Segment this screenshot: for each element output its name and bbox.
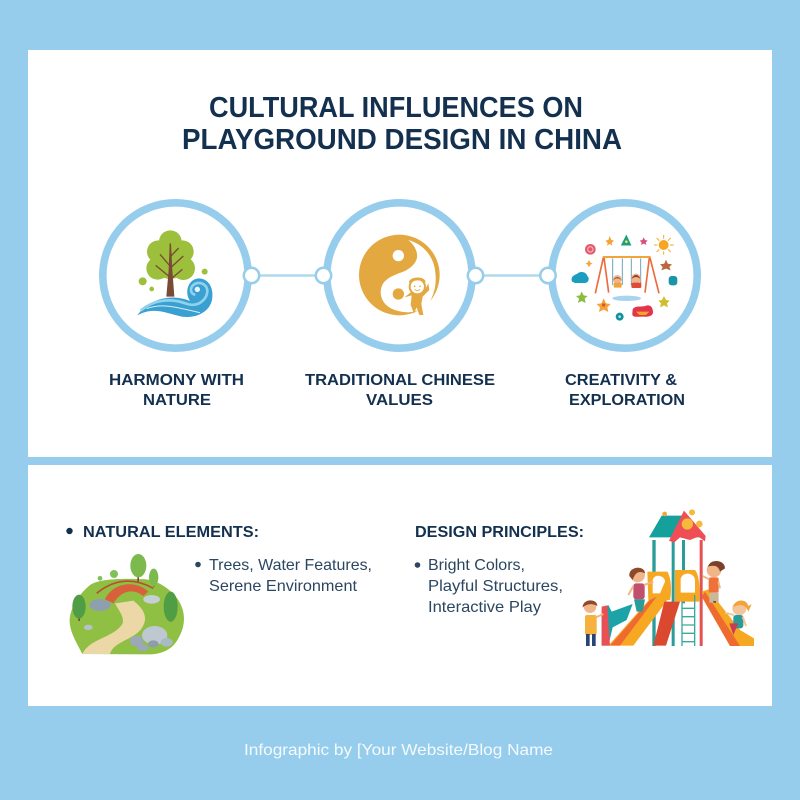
label: traditional chinese values	[305, 372, 495, 409]
illustration: playground with children	[583, 509, 754, 646]
text: design principles list	[415, 557, 563, 616]
heading: design principles: DESIGN PRINCIPLES:	[415, 524, 584, 541]
circle: nature	[103, 203, 248, 348]
label: creativity and exploration: CREATIVITY &	[565, 372, 677, 389]
label: traditional chinese values: VALUES	[366, 392, 433, 409]
title: CULTURAL INFLUENCES ON	[209, 92, 583, 124]
icon: swing and play shapes	[572, 235, 677, 321]
label: harmony with nature: HARMONY WITH	[109, 372, 244, 389]
title: PLAYGROUND DESIGN IN CHINA	[182, 124, 622, 156]
label: harmony with nature: NATURE	[143, 392, 211, 409]
label: creativity and exploration: EXPLORATION	[569, 392, 685, 409]
text: design principles list: Playful Structures,	[428, 578, 563, 595]
connector: circle 1 to circle 2	[252, 274, 324, 277]
connector nodes	[244, 268, 556, 283]
text: natural elements list: Trees, Water Features,	[209, 557, 372, 574]
text: natural elements list	[195, 557, 372, 595]
circle: values	[327, 203, 472, 348]
illustration: park with bridge	[70, 554, 184, 654]
heading: natural elements: NATURAL ELEMENTS:	[83, 524, 259, 541]
connector: circle 2 to circle 3	[476, 274, 548, 277]
label: creativity and exploration	[565, 372, 685, 409]
text: design principles list: Interactive Play	[428, 599, 541, 616]
text: design principles list: Bright Colors,	[428, 557, 525, 574]
panel: top	[28, 50, 772, 457]
footer: Infographic by [Your Website/Blog Name	[244, 742, 553, 759]
icon: yin yang with child	[359, 235, 440, 315]
title	[182, 92, 622, 156]
panel: bottom	[28, 465, 772, 706]
label: harmony with nature	[109, 372, 244, 409]
circle: creativity	[552, 203, 697, 348]
label: traditional chinese values: TRADITIONAL CHINESE	[305, 372, 495, 389]
icon: tree and wave	[137, 230, 212, 317]
text: natural elements list: Serene Environment	[209, 578, 358, 595]
